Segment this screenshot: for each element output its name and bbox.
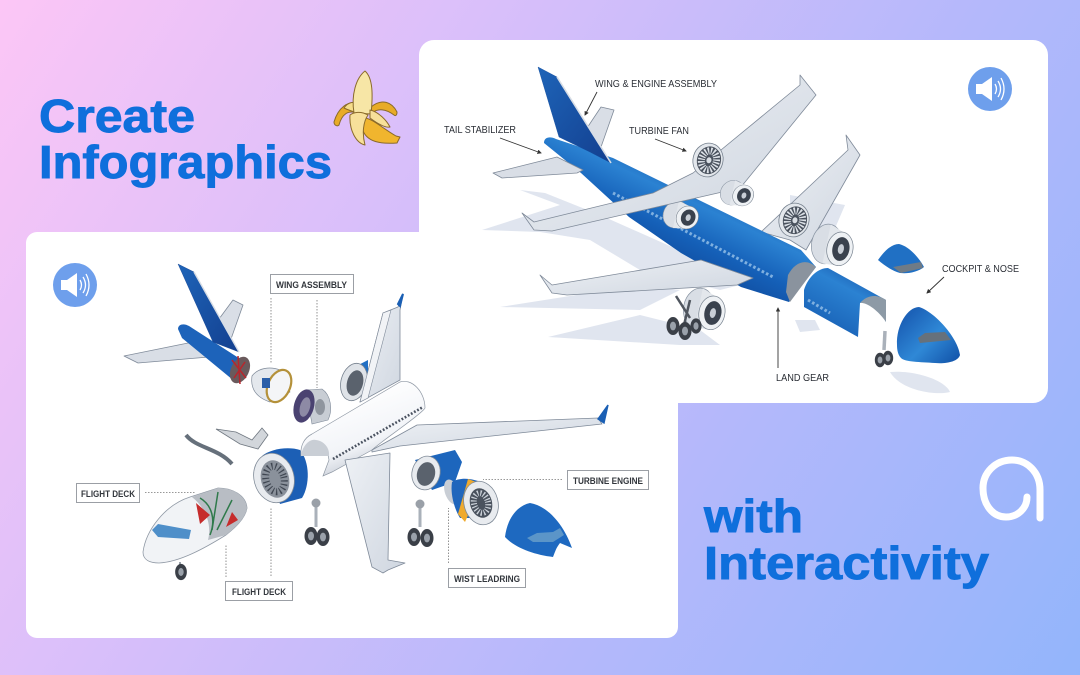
rear engine under wing bbox=[660, 199, 701, 231]
callout: turbine fan bbox=[629, 125, 689, 151]
lower wing bbox=[540, 260, 753, 295]
callout: land gear: LAND GEAR bbox=[776, 372, 829, 384]
tail fin bbox=[538, 67, 611, 163]
callout: wing & engine assembly: WING & ENGINE ASSEMBLY bbox=[595, 78, 717, 90]
icon: speaker, upper card bbox=[968, 67, 1012, 111]
heading: Create Infographics bbox=[39, 90, 332, 188]
white fuselage bbox=[301, 381, 425, 476]
turbine part with orange band bbox=[441, 477, 503, 529]
callout: cockpit & nose: COCKPIT & NOSE bbox=[942, 263, 1019, 275]
landing gear, centre bbox=[408, 500, 434, 547]
icon: brand logo bbox=[983, 460, 1040, 518]
callout: flight deck, left: FLIGHT DECK bbox=[81, 489, 135, 500]
right wing bbox=[372, 418, 602, 452]
lower wing bbox=[345, 453, 405, 573]
ground shadows bbox=[482, 190, 950, 393]
nose landing gear bbox=[875, 331, 893, 367]
chart: exploded white aircraft bbox=[124, 264, 608, 580]
panel: upper-right aircraft card bbox=[419, 40, 1048, 403]
callout: tail stabilizer bbox=[444, 124, 541, 153]
cockpit canopy piece bbox=[878, 244, 924, 273]
far wing bbox=[360, 294, 403, 402]
callout: wist leadring bbox=[448, 508, 526, 588]
callout: turbine fan: TURBINE FAN bbox=[629, 125, 689, 137]
open fuselage end bbox=[786, 262, 816, 302]
engine: lower bbox=[680, 285, 729, 333]
callout: wing & engine assembly bbox=[585, 78, 717, 115]
pipe and bracket parts bbox=[186, 428, 268, 464]
callout: wing assembly bbox=[270, 274, 354, 388]
main landing gear bbox=[666, 296, 702, 340]
panel: lower-left exploded aircraft card bbox=[26, 232, 678, 638]
callout: tail stabilizer: TAIL STABILIZER bbox=[444, 124, 516, 136]
rear ring part bbox=[252, 366, 296, 406]
far tail stabilizer bbox=[587, 107, 614, 147]
engine: far fan bbox=[775, 200, 813, 240]
callout: cockpit & nose bbox=[927, 263, 1019, 293]
engine under right wing bbox=[408, 450, 462, 493]
callout: flight deck, left bbox=[76, 484, 196, 502]
heading: Create Infographics: Infographics bbox=[39, 136, 332, 188]
fuselage section bbox=[804, 268, 886, 337]
callout: turbine engine bbox=[483, 470, 648, 490]
chart: assembled blue aircraft with detached nose bbox=[482, 67, 960, 393]
big blue engine bbox=[248, 448, 308, 507]
heading: with Interactivity bbox=[703, 490, 989, 589]
heading: Create Infographics: Create bbox=[39, 90, 195, 142]
callout: flight deck, bottom: FLIGHT DECK bbox=[232, 587, 286, 598]
compressor part bbox=[290, 387, 331, 425]
callout: wing assembly: WING ASSEMBLY bbox=[276, 280, 348, 291]
far right wing bbox=[761, 135, 860, 250]
callout: turbine engine: TURBINE ENGINE bbox=[573, 476, 643, 487]
fuselage bbox=[544, 137, 816, 302]
white cockpit section bbox=[143, 488, 247, 580]
fuselage windows bbox=[613, 193, 773, 277]
heading: with Interactivity: Interactivity bbox=[704, 537, 989, 589]
heading: with Interactivity: with bbox=[703, 490, 803, 542]
near tail stabilizer bbox=[493, 157, 583, 178]
engine behind far wing bbox=[337, 360, 371, 404]
engine: rear under near wing bbox=[718, 179, 756, 208]
icon: peeled banana bbox=[334, 71, 400, 145]
callout: wist leadring: WIST LEADRING bbox=[454, 574, 520, 585]
nose cone bbox=[897, 307, 960, 363]
landing gear, left bbox=[304, 498, 330, 546]
near wing bbox=[522, 75, 816, 231]
icon: speaker, lower card bbox=[53, 263, 97, 307]
blue nose shell bbox=[505, 503, 572, 557]
engine: fan under wing bbox=[689, 140, 727, 180]
tail section bbox=[124, 264, 254, 386]
callout: land gear bbox=[776, 308, 829, 384]
callout: flight deck, bottom bbox=[226, 508, 292, 600]
engine: far rear bbox=[808, 221, 857, 269]
